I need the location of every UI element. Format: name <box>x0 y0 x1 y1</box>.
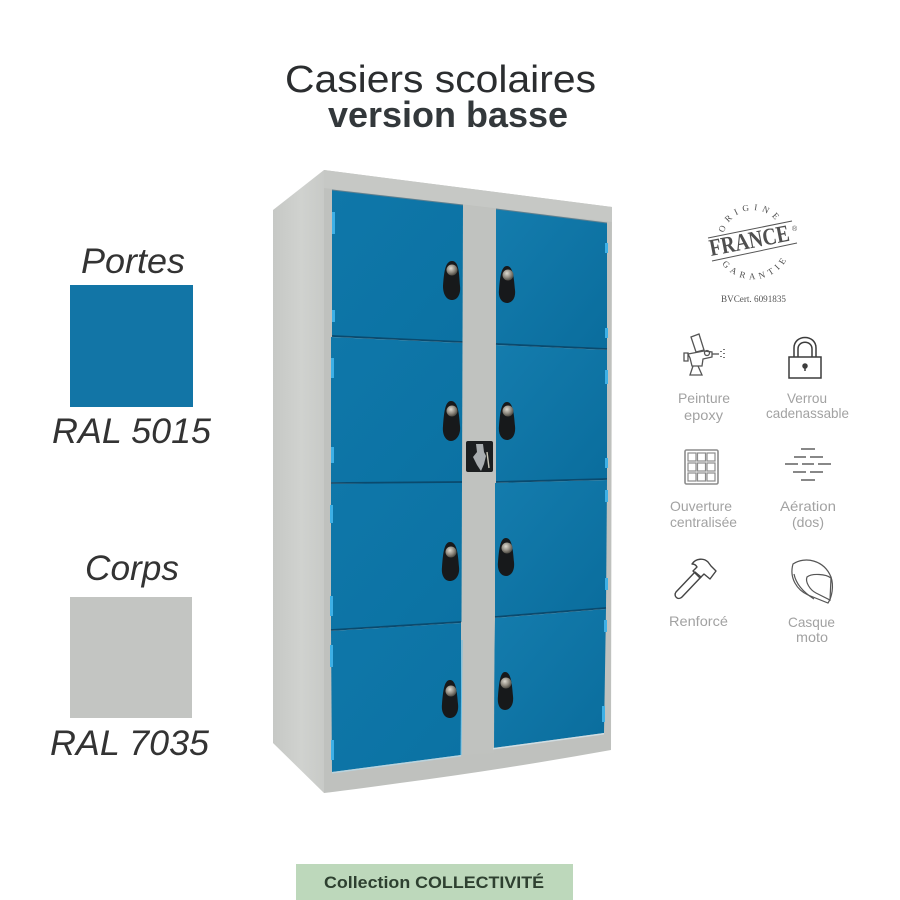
feature: renforce <box>669 559 728 629</box>
word: GARANTIE: GARANTIE <box>723 258 786 280</box>
icon: hammer <box>675 559 716 598</box>
title: version basse <box>328 94 568 135</box>
label: Casque moto: moto <box>796 629 828 645</box>
panel: door colour <box>52 242 212 451</box>
title: Casiers scolaires <box>285 59 596 101</box>
handle row 1 right <box>499 266 515 303</box>
swatch: RAL 5015 <box>70 285 193 407</box>
label: Ouverture centralisee: centralisée <box>670 514 737 530</box>
icon: spray gun <box>684 334 724 375</box>
certificate number: BVCert. 6091835 <box>721 295 786 305</box>
label: Verrou cadenassable: cadenassable <box>766 405 849 421</box>
label: Renforce: Renforcé <box>669 613 728 629</box>
registered mark: ® <box>792 225 798 233</box>
handle row 1 left <box>443 261 460 300</box>
label: RAL 7035: RAL 7035 <box>50 724 210 763</box>
icon: locker grid <box>685 450 718 484</box>
feature: peinture epoxy <box>678 334 730 423</box>
icon: vent lines <box>785 449 831 480</box>
cabinet side <box>273 170 324 793</box>
icon: padlock <box>789 338 821 378</box>
handle row 3 left <box>442 542 459 581</box>
label: Peinture epoxy: epoxy <box>684 407 723 423</box>
title <box>285 59 596 135</box>
feature: ouverture centralisee <box>670 450 737 530</box>
label: Aeration (dos): Aération <box>780 498 836 514</box>
hinges <box>330 212 608 760</box>
left door column <box>331 190 463 772</box>
cabinet front frame <box>324 170 612 793</box>
feature: verrou cadenassable <box>766 338 849 421</box>
banner text: Collection COLLECTIVITÉ <box>324 873 544 892</box>
feature: aeration dos <box>780 449 836 530</box>
panel: body colour <box>50 549 210 763</box>
label: Verrou cadenassable: Verrou <box>787 390 827 406</box>
label: Portes: Portes <box>81 242 185 281</box>
feature: casque moto <box>788 560 835 645</box>
label: RAL 5015: RAL 5015 <box>52 412 212 451</box>
swatch: RAL 7035 <box>70 597 192 718</box>
handle row 3 right <box>498 538 514 576</box>
logo: Origine France Garantie <box>707 204 798 305</box>
label: Aeration (dos): (dos) <box>792 514 824 530</box>
locker cabinet <box>273 170 612 793</box>
word: FRANCE: FRANCE <box>707 221 792 262</box>
icon: helmet <box>792 560 832 603</box>
handle row 2 left <box>443 401 460 441</box>
label: Ouverture centralisee: Ouverture <box>670 498 732 514</box>
central lock plate <box>466 441 493 472</box>
label: Peinture epoxy: Peinture <box>678 390 730 406</box>
collection banner <box>296 864 573 900</box>
right door column <box>493 209 607 748</box>
handle row 4 right <box>498 672 513 710</box>
label: Corps: Corps <box>85 549 179 588</box>
handle row 4 left <box>442 680 458 718</box>
word: ORIGINE: ORIGINE <box>719 204 780 232</box>
handle row 2 right <box>499 402 515 440</box>
central strip <box>461 205 496 755</box>
label: Casque moto: Casque <box>788 614 835 630</box>
